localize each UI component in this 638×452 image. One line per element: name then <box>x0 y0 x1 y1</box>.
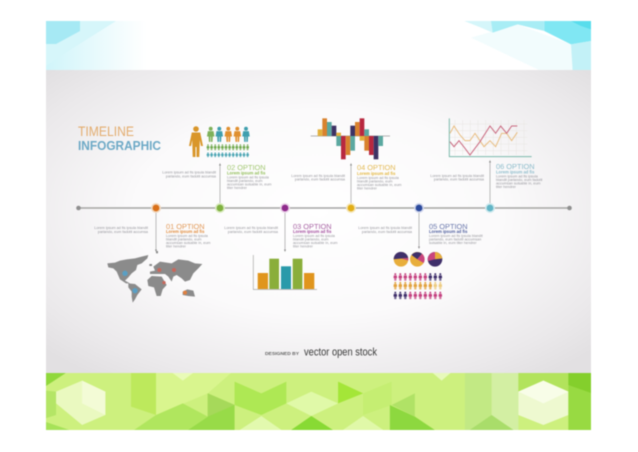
option 04 text: titer hendrer <box>357 186 378 190</box>
option 03 text: titer hendrer <box>293 244 314 248</box>
option 03 text: Lorem ipsum ad fis ipsula blandit <box>224 226 278 230</box>
option 02 text: parlando, eum fadotil accumsa <box>166 174 217 178</box>
option 02 text: 02 OPTION <box>227 163 266 172</box>
chart: diverging bars <box>311 118 390 159</box>
option 04 text: blandit parlando, eum <box>357 180 392 184</box>
option 06 text: Lorem ipsum ad fis <box>496 170 535 174</box>
chart: bar chart <box>253 255 317 290</box>
title <box>78 124 162 153</box>
option 01 text: Lorem ipsum ad fis <box>166 229 205 234</box>
option 01 text: titer hendrer <box>166 244 187 248</box>
option 05 text: Lorem ipsum ad fis ipsula blandit <box>429 234 483 238</box>
panel: top cyan band <box>46 21 591 71</box>
option 06 text: parlando, eum fadotil accumsa <box>434 178 485 182</box>
option 06 text: titer hendrer <box>496 185 517 189</box>
option 02 text: accumsan suisable in, eum <box>227 182 271 186</box>
icon: people group <box>189 126 250 157</box>
option 01 text: 01 OPTION <box>166 222 205 231</box>
option 06 text: blandit parlando, eum fadotil <box>496 178 543 182</box>
credit line <box>265 346 377 358</box>
option 03 text: 03 OPTION <box>293 222 332 231</box>
option 02 text <box>162 163 271 190</box>
option 05 text: 05 OPTION <box>429 222 468 231</box>
title: TIMELINE <box>78 124 134 139</box>
option 06 text: 06 OPTION <box>496 162 535 171</box>
option 04 text: parlando, eum fadotil accumsa <box>295 178 346 182</box>
panel: central background <box>46 70 591 373</box>
option 03 text: Lorem ipsum ad fis <box>293 229 332 234</box>
icon: pie charts <box>394 252 442 267</box>
option 06 text: Lorem ipsum ad fis ipsula <box>496 174 539 178</box>
option 01 text: Lorem ipsum ad fis ipsula <box>166 234 209 238</box>
option 02 text: Lorem ipsum ad fis ipsula blandit <box>162 170 216 174</box>
timeline axis <box>76 203 572 213</box>
option 05 text: suisable in, eum titer hendrer <box>429 241 477 245</box>
option 02 text: titer hendrer <box>227 186 248 190</box>
icon: people rows <box>393 273 442 299</box>
option 06 text: accumsan suisable in, eum <box>496 182 540 186</box>
option 02 text: Lorem ipsum ad fis <box>227 170 266 176</box>
option 03 text: blandit parlando, eum <box>293 238 328 242</box>
option 04 text: accumsan suisable in, eum <box>357 183 401 187</box>
chart: line chart <box>449 118 532 157</box>
option 01 text <box>94 222 210 248</box>
connector lines <box>155 160 491 252</box>
option 03 text: Lorem ipsum ad fis ipsula <box>293 234 336 238</box>
option 01 text: parlando, eum fadotil accumsa <box>98 230 149 234</box>
option 03 text <box>224 222 337 248</box>
panel: bottom green band <box>40 370 597 433</box>
option 06 text <box>430 162 543 189</box>
option 01 text: blandit parlando, eum <box>166 238 201 242</box>
option 03 text: accumsan suisable in, eum <box>293 241 337 245</box>
option 02 text: Lorem ipsum ad fis ipsula <box>227 176 270 180</box>
title: INFOGRAPHIC <box>78 138 162 153</box>
credit line: vector open stock <box>304 346 377 358</box>
option 03 text: parlando, eum fadotil accumsa <box>228 230 279 234</box>
option 05 text: Lorem ipsum ad fis ipsula blandit <box>358 226 412 230</box>
option 04 text: 04 OPTION <box>357 163 396 172</box>
option 04 text: Lorem ipsum ad fis <box>357 171 396 176</box>
option 04 text: Lorem ipsum ad fis ipsula <box>357 176 400 180</box>
option 01 text: Lorem ipsum ad fis ipsula blandit <box>94 226 148 230</box>
option 06 text: Lorem ipsum ad fis ipsula blandit <box>430 174 484 178</box>
option 05 text <box>358 222 483 245</box>
credit line: DESIGNED BY <box>265 351 300 357</box>
option 05 text: parlando, eum fadotil accumsa <box>362 230 413 234</box>
icon: world map <box>107 251 202 303</box>
option 02 text: blandit parlando, eum <box>227 179 262 183</box>
option 04 text <box>291 163 401 190</box>
option 04 text: Lorem ipsum ad fis ipsula blandit <box>291 174 345 178</box>
option 05 text: Lorem ipsum ad fis <box>429 229 468 234</box>
option 05 text: parlando, eum fadotil accumsan <box>429 238 481 242</box>
option 01 text: accumsan suisable in, eum <box>166 241 210 245</box>
